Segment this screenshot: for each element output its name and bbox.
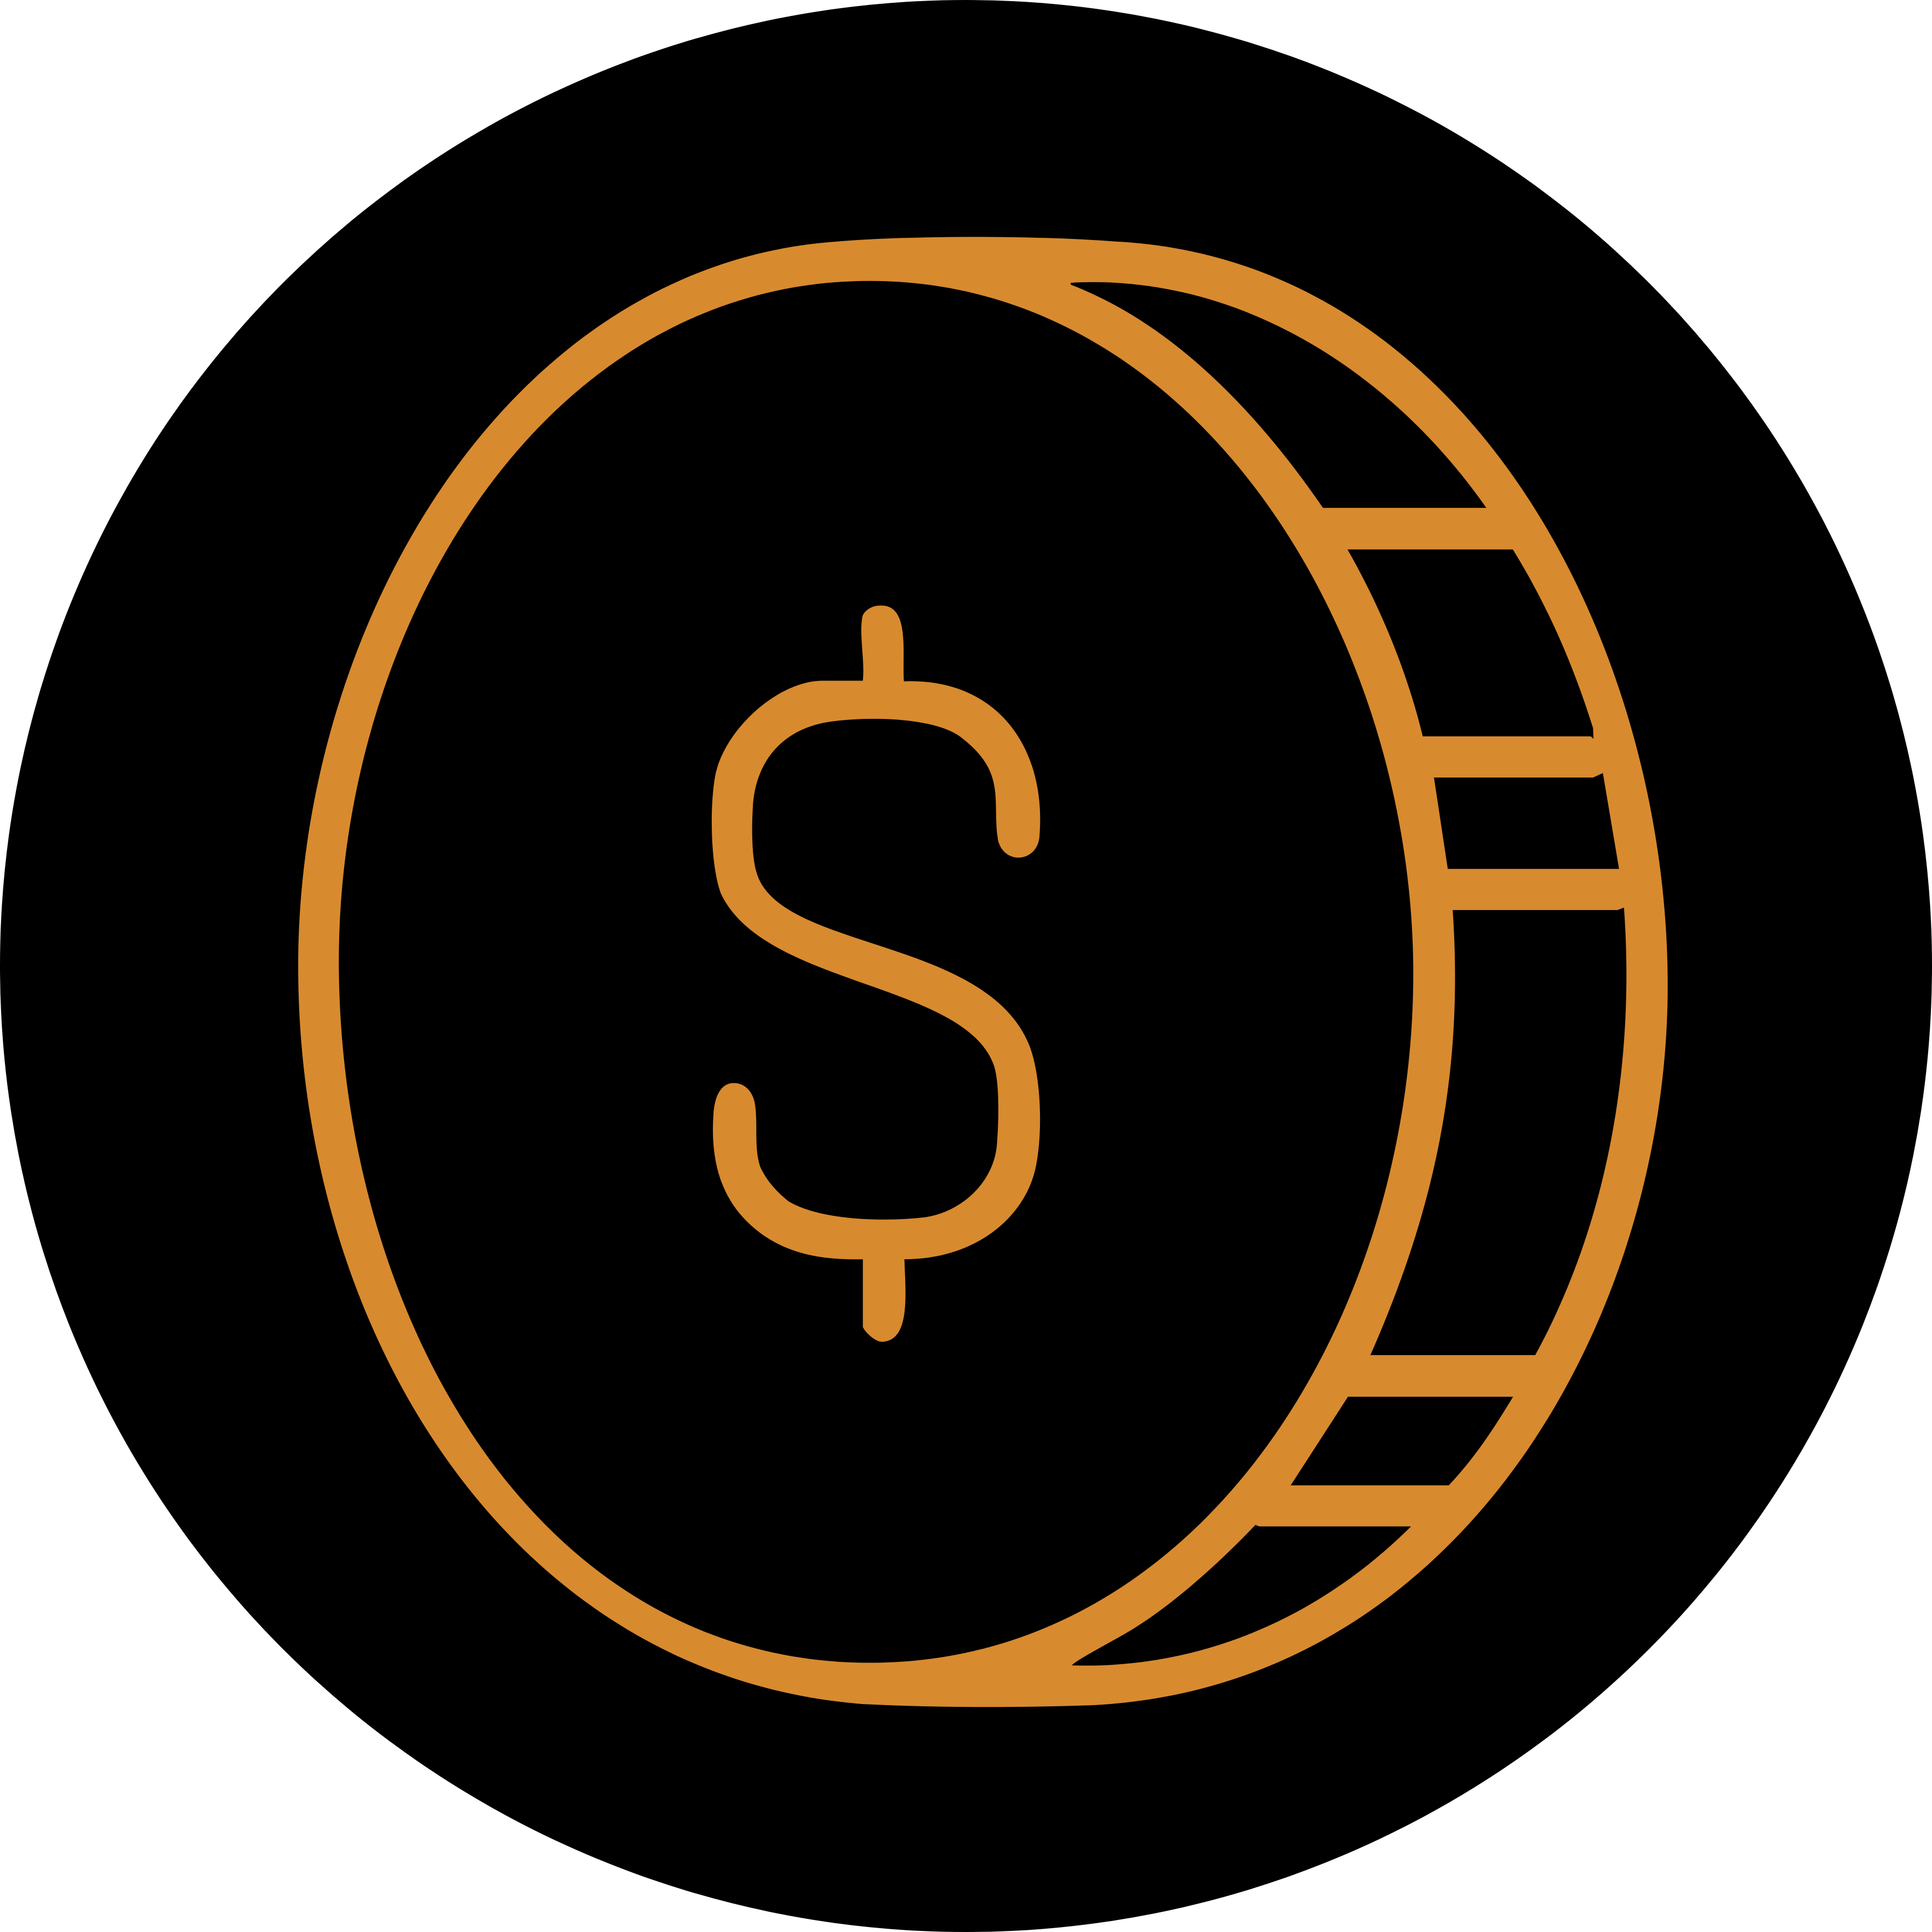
coin face xyxy=(339,281,1413,1663)
coin body xyxy=(298,237,1668,1707)
icon: dollar sign xyxy=(712,605,1040,1342)
coin edge segments xyxy=(1071,282,1626,1666)
